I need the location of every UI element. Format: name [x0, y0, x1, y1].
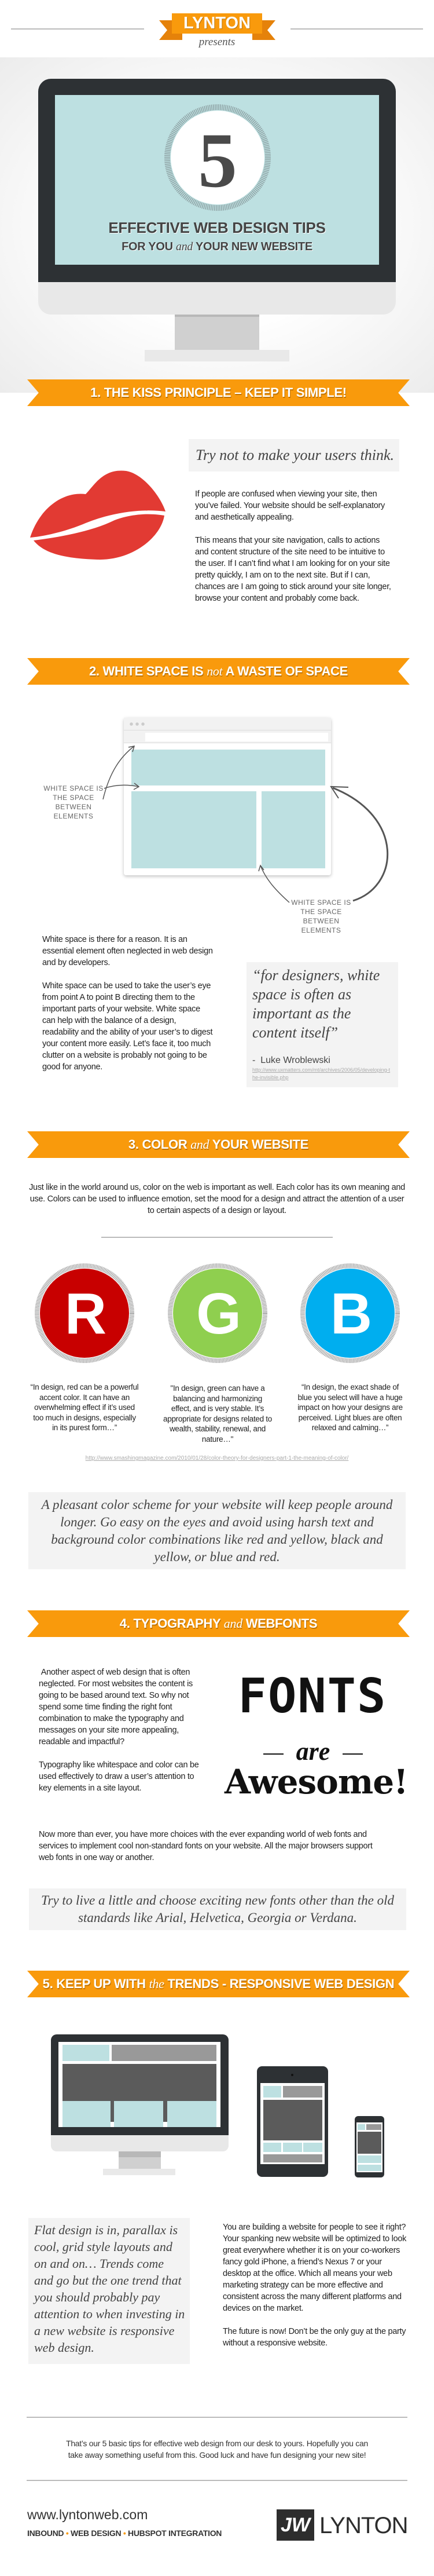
footer: lynton logo: [277, 2509, 408, 2541]
fonts are awesome graphic: FONTS: [238, 1669, 387, 1724]
footer: url and tagline: [27, 2507, 222, 2538]
banner 5: 5. KEEP UP WITH the TRENDS - RESPONSIVE WEB DESIGN: [43, 1976, 394, 1991]
text: white space: [42, 935, 213, 1072]
text: typography: [39, 1668, 199, 1793]
text: web fonts: Now more than ever, you have more choices with the ever expanding world of web fonts and services to implement cool non-standard fonts on your website. All the major browsers support web fonts in one way or another.: [39, 1830, 373, 1862]
closing text: That’s our 5 basic tips for effective web design from our desk to yours. Hopefully you can: [66, 2439, 368, 2448]
banner 4: 4. TYPOGRAPHY and WEBFONTS: [120, 1616, 317, 1631]
closing text: take away something useful from this. Good luck and have fun designing your new site!: [68, 2450, 366, 2460]
fonts are awesome graphic: Awesome!: [225, 1762, 408, 1802]
banner 3: 3. COLOR and YOUR WEBSITE: [128, 1137, 308, 1152]
quote: luke wroblewski: [247, 962, 398, 1087]
title: EFFECTIVE WEB DESIGN TIPS: [108, 219, 326, 236]
source url: http://www.smashingmagazine.com/2010/01/28/color-theory-for-designers-part-1-the-meaning-of-color/: [86, 1455, 348, 1461]
quote: luke wroblewski: “for designers, white space is often as important as the content itself”: [252, 967, 380, 1041]
text: kiss: [195, 489, 391, 603]
fonts are awesome graphic: are: [296, 1737, 330, 1766]
banner 1: 1. THE KISS PRINCIPLE – KEEP IT SIMPLE!: [90, 385, 347, 400]
circle G: [170, 1266, 265, 1361]
emblem: number 5: 5: [198, 118, 237, 204]
emblem: number 5: [164, 104, 271, 211]
footer: url and tagline: www.lyntonweb.com: [27, 2507, 148, 2522]
header: lynton ribbon: presents: [199, 36, 235, 48]
text: kiss: If people are confused when viewing your site, then you’ve failed. Your website should be self-explanatory and aesthetically appealing.: [195, 489, 385, 522]
text: kiss: This means that your site navigation, calls to actions and content structure of the site need to be intuitive to the user. If I can’t find what I am looking for on your site pretty quickly, I am on to the next site. But if I can, chances are I am going to stick around your site longer, browse your content and probably come back.: [195, 536, 391, 603]
text: typography: Another aspect of web design that is often neglected. For most websites the content is going to be based around text. So why not spend some time finding the right font combination to make the typography and messages on your site more appealing, readable and impactful?: [39, 1668, 193, 1746]
banner 5: [27, 1971, 410, 1997]
banner 1: [27, 379, 410, 406]
RGB circles: [35, 1263, 400, 1363]
devices: tablet: [257, 2066, 328, 2177]
quote: try not to make users think: [189, 439, 399, 472]
quote: pleasant color scheme: A pleasant color scheme for your website will keep people around longer. Go easy on the eyes and avoid using harsh text and background color combinations like red and yellow, black and yellow, or blue and red.: [42, 1497, 392, 1564]
quote: flat design: Flat design is in, parallax is cool, grid style layouts and on and on… Trends come and go but the one trend that you should probably pay attention to when investing in a new website is responsive web design.: [34, 2223, 185, 2355]
arrows: white space callouts: [102, 746, 389, 902]
footer: url and tagline: INBOUND • WEB DESIGN • HUBSPOT INTEGRATION: [27, 2529, 222, 2538]
quote: luke wroblewski: http://www.uxmatters.com/mt/archives/2006/05/developing-the-invisible.php: [252, 1067, 390, 1080]
text: white space: White space is there for a reason. It is an essential element often neglected in web design and by developers.: [42, 935, 213, 967]
circle G: G: [196, 1281, 241, 1346]
captions: red: “In design, red can be a powerful accent color. It can have an overwhelming effect if it’s used too much in designs, especially in its purest form…”: [31, 1383, 138, 1432]
browser mockup: [124, 718, 331, 875]
captions: green: "In design, green can have a balancing and harmonizing effect, and is very stable. It’s appropriate for designs related to wealth, stability, renewal, and nature…": [163, 1384, 272, 1444]
banner 2: [27, 658, 410, 685]
header: lynton ribbon: LYNTON: [183, 14, 251, 32]
circle B: B: [330, 1281, 372, 1346]
captions: blue: “In design, the exact shade of blue you select will have a huge impact on how your designs are perceived. Light blues are often relaxed and calming…”: [297, 1383, 403, 1432]
circle R: R: [65, 1281, 106, 1346]
closing text: [27, 2417, 407, 2481]
footer: lynton logo: JW: [281, 2514, 310, 2536]
text: white space: White space can be used to take the user’s eye from point A to point B directing them to the important parts of your website. White space can help with the balance of a design, readability and the ability of your user’s to digest your content more easily. Let’s face it, too much clutter on a website is probably not going to be good for anyone.: [42, 981, 212, 1072]
quote: try to live a little: Try to live a little and choose exciting new fonts other than the old standards like Arial, Helvetica, Georgia or Verdana.: [41, 1893, 394, 1925]
icon: lips: [30, 470, 165, 560]
text: color intro: Just like in the world around us, color on the web is important as well. Each color has its own meaning and use. Colors can be used to influence emotion, set the mood for a design and attract the attention of a user to certain aspects of a design or layout.: [29, 1183, 405, 1215]
label: white space right: WHITE SPACE IS THE SPACE BETWEEN ELEMENTS: [291, 898, 351, 934]
fonts are awesome graphic: [225, 1669, 408, 1802]
monitor: [38, 79, 396, 361]
banner 3: [27, 1131, 410, 1158]
devices: phone: [355, 2116, 384, 2177]
banner 4: [27, 1610, 410, 1637]
devices: desktop: [51, 2034, 229, 2175]
text: responsive: The future is now! Don’t be the only guy at the party without a responsive website.: [223, 2327, 406, 2348]
text: typography: Typography like whitespace and color can be used effectively to draw a user’s attention to key elements in a site layout.: [39, 1760, 198, 1793]
text: responsive: You are building a website for people to see it right? Your spanking new website will be optimized to look great everywhere whether it is on your co-workers fancy gold iPhone, a friend’s Nexus 7 or your desktop at the office. Which all means your web marketing strategy can be more effective and consistent across the many different platforms and devices on the market.: [223, 2223, 406, 2313]
subtitle: FOR YOU and YOUR NEW WEBSITE: [122, 240, 312, 253]
quote: try not to make users think: Try not to make your users think.: [196, 447, 394, 463]
banner 2: 2. WHITE SPACE IS not A WASTE OF SPACE: [89, 664, 348, 678]
header: lynton ribbon: [11, 13, 423, 48]
quote: luke wroblewski: - Luke Wroblewski: [252, 1055, 330, 1065]
label: white space left: WHITE SPACE IS THE SPACE BETWEEN ELEMENTS: [43, 784, 104, 820]
desktop lower cols: [62, 2101, 111, 2127]
circle B: [303, 1266, 398, 1361]
circle R: [37, 1266, 132, 1361]
hero panel: monitor: [0, 57, 434, 393]
footer: lynton logo: LYNTON: [319, 2513, 408, 2538]
